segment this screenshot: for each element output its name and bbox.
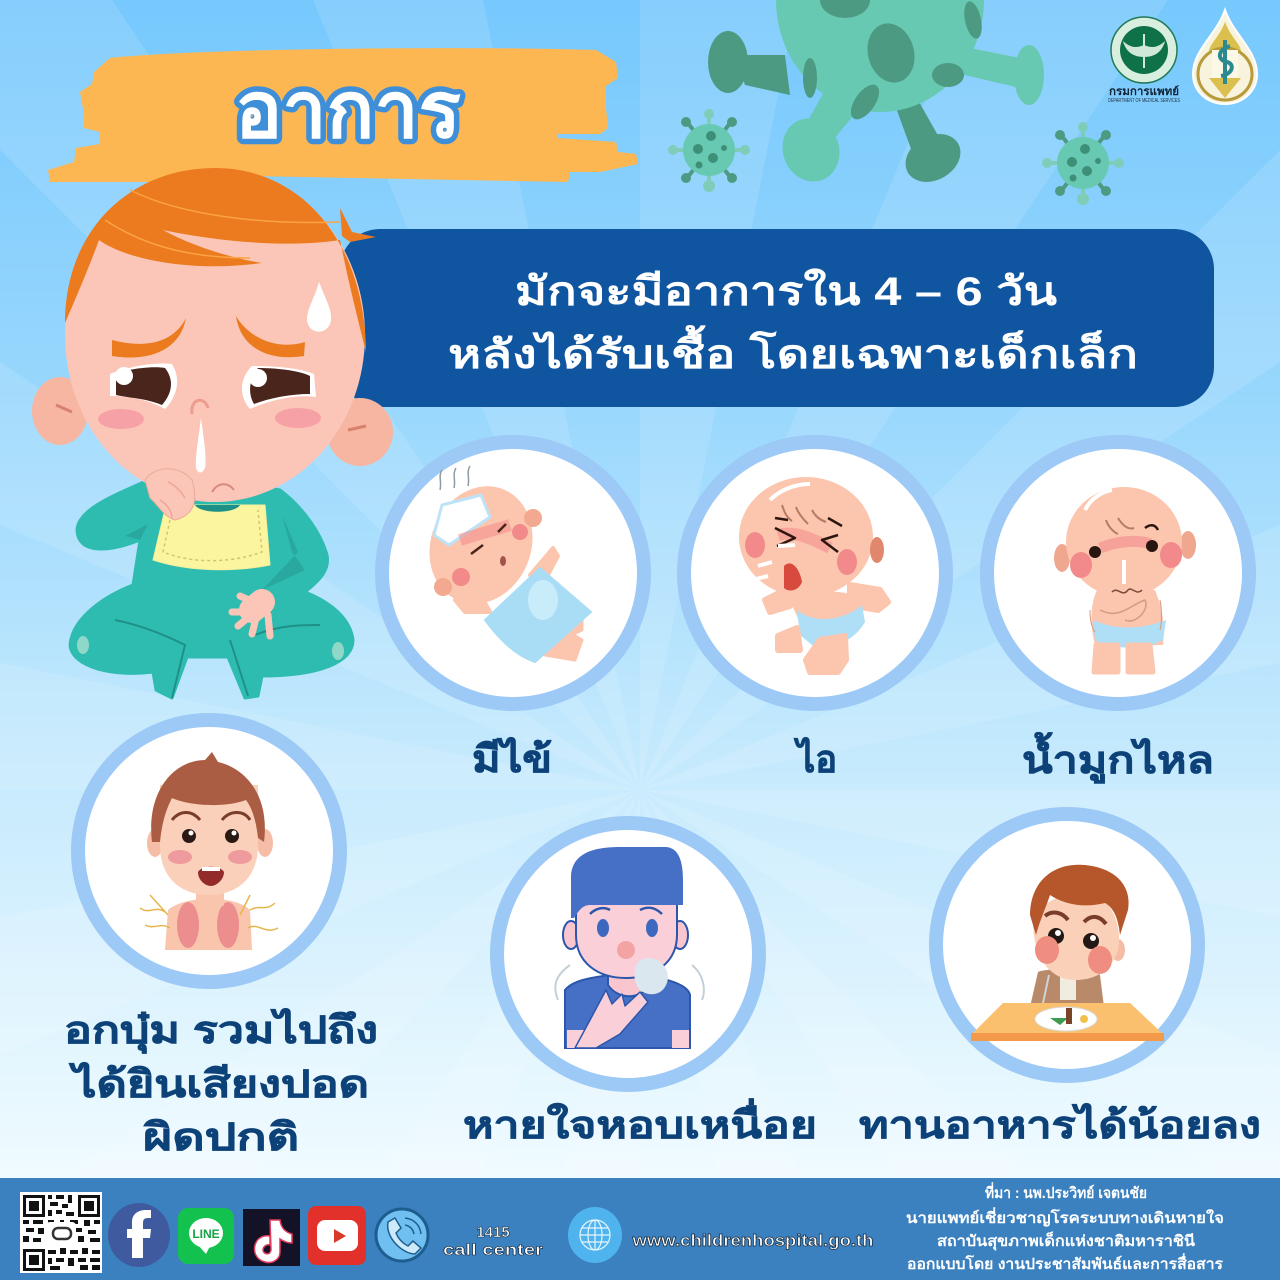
icon: globe (568, 1207, 622, 1263)
icon: youtube (308, 1206, 366, 1265)
label: cough: ไอ (793, 737, 837, 781)
qr code (20, 1192, 102, 1273)
ears (32, 377, 88, 445)
source credits: สถาบันสุขภาพเด็กแห่งชาติมหาราชินี (937, 1231, 1196, 1251)
logo: department of medical services (1108, 17, 1181, 104)
source credits: ออกแบบโดย งานประชาสัมพันธ์และการสื่อสาร (907, 1253, 1224, 1273)
panel: chest retraction (78, 720, 340, 982)
icon: line: LINE (192, 1227, 220, 1241)
text: call center: call center (443, 1242, 543, 1259)
hand on knee (232, 596, 270, 636)
eyebrows (112, 318, 186, 357)
icon: facebook (108, 1203, 170, 1267)
panel: shortness of breath (497, 823, 759, 1085)
icon: phone (376, 1209, 428, 1261)
cheeks (98, 409, 144, 429)
nose (192, 400, 208, 414)
main baby illustration (32, 168, 393, 698)
source credits: นายแพทย์เชี่ยวชาญโรคระบบทางเดินหายใจ (906, 1207, 1224, 1227)
title brush stroke (48, 48, 638, 182)
panel: fever (382, 442, 644, 704)
icon: baby with fever (412, 466, 591, 662)
website url: www.childrenhospital.go.th (631, 1231, 874, 1250)
banner (340, 229, 1214, 407)
head (65, 168, 365, 502)
label: chest retraction: อกบุ๋ม รวมไปถึง (64, 1008, 378, 1054)
virus: small right (1042, 122, 1124, 205)
label: chest retraction: ผิดปกติ (143, 1117, 299, 1159)
icon: tiktok (243, 1209, 300, 1266)
label: runny nose: น้ำมูกไหล (1022, 732, 1214, 784)
panel: runny nose (987, 442, 1249, 704)
text: call center (443, 1224, 543, 1259)
label: eating less: ทานอาหารได้น้อยลง (859, 1103, 1261, 1147)
icon: baby runny nose (1054, 487, 1196, 672)
virus: small left (668, 109, 750, 192)
logo: department of medical services: กรมการแพทย์ (1109, 85, 1179, 98)
icon: person breathing hard (555, 847, 704, 1048)
panel: cough (684, 442, 946, 704)
label: chest retraction: ได้ยินเสียงปอด (68, 1062, 369, 1106)
logo: department of medical services: DEPARTMENT OF MEDICAL SERVICES (1108, 98, 1181, 104)
banner text line 2: หลังได้รับเชื้อ โดยเฉพาะเด็กเล็ก (448, 325, 1138, 377)
source credits (906, 1182, 1224, 1273)
label: fever: มีไข้ (472, 737, 552, 781)
icon: line (178, 1208, 234, 1264)
logo: queen sirikit institute (1193, 10, 1257, 104)
footer bar (0, 1178, 1280, 1280)
title: อาการ (235, 66, 461, 154)
bib (153, 505, 270, 570)
panel: eating less (936, 814, 1198, 1076)
mouth (212, 484, 234, 492)
text: call center: 1415 (476, 1224, 510, 1241)
source credits: ที่มา : นพ.ประวิทย์ เจตนชัย (985, 1182, 1147, 1202)
baby body (70, 470, 353, 698)
eyes (110, 363, 177, 409)
label: shortness of breath: หายใจหอบเหนื่อย (463, 1098, 817, 1147)
icon: boy with lungs (140, 752, 278, 950)
hand on face (145, 469, 195, 520)
icon: baby coughing (739, 477, 888, 672)
hair (65, 168, 366, 352)
virus: large (708, 0, 1044, 192)
sweat (307, 282, 331, 332)
banner text line 1: มักจะมีอาการใน 4 – 6 วัน (515, 268, 1057, 314)
icon: boy at table (971, 865, 1164, 1041)
label: chest retraction (64, 1008, 378, 1159)
mucus (196, 418, 206, 472)
